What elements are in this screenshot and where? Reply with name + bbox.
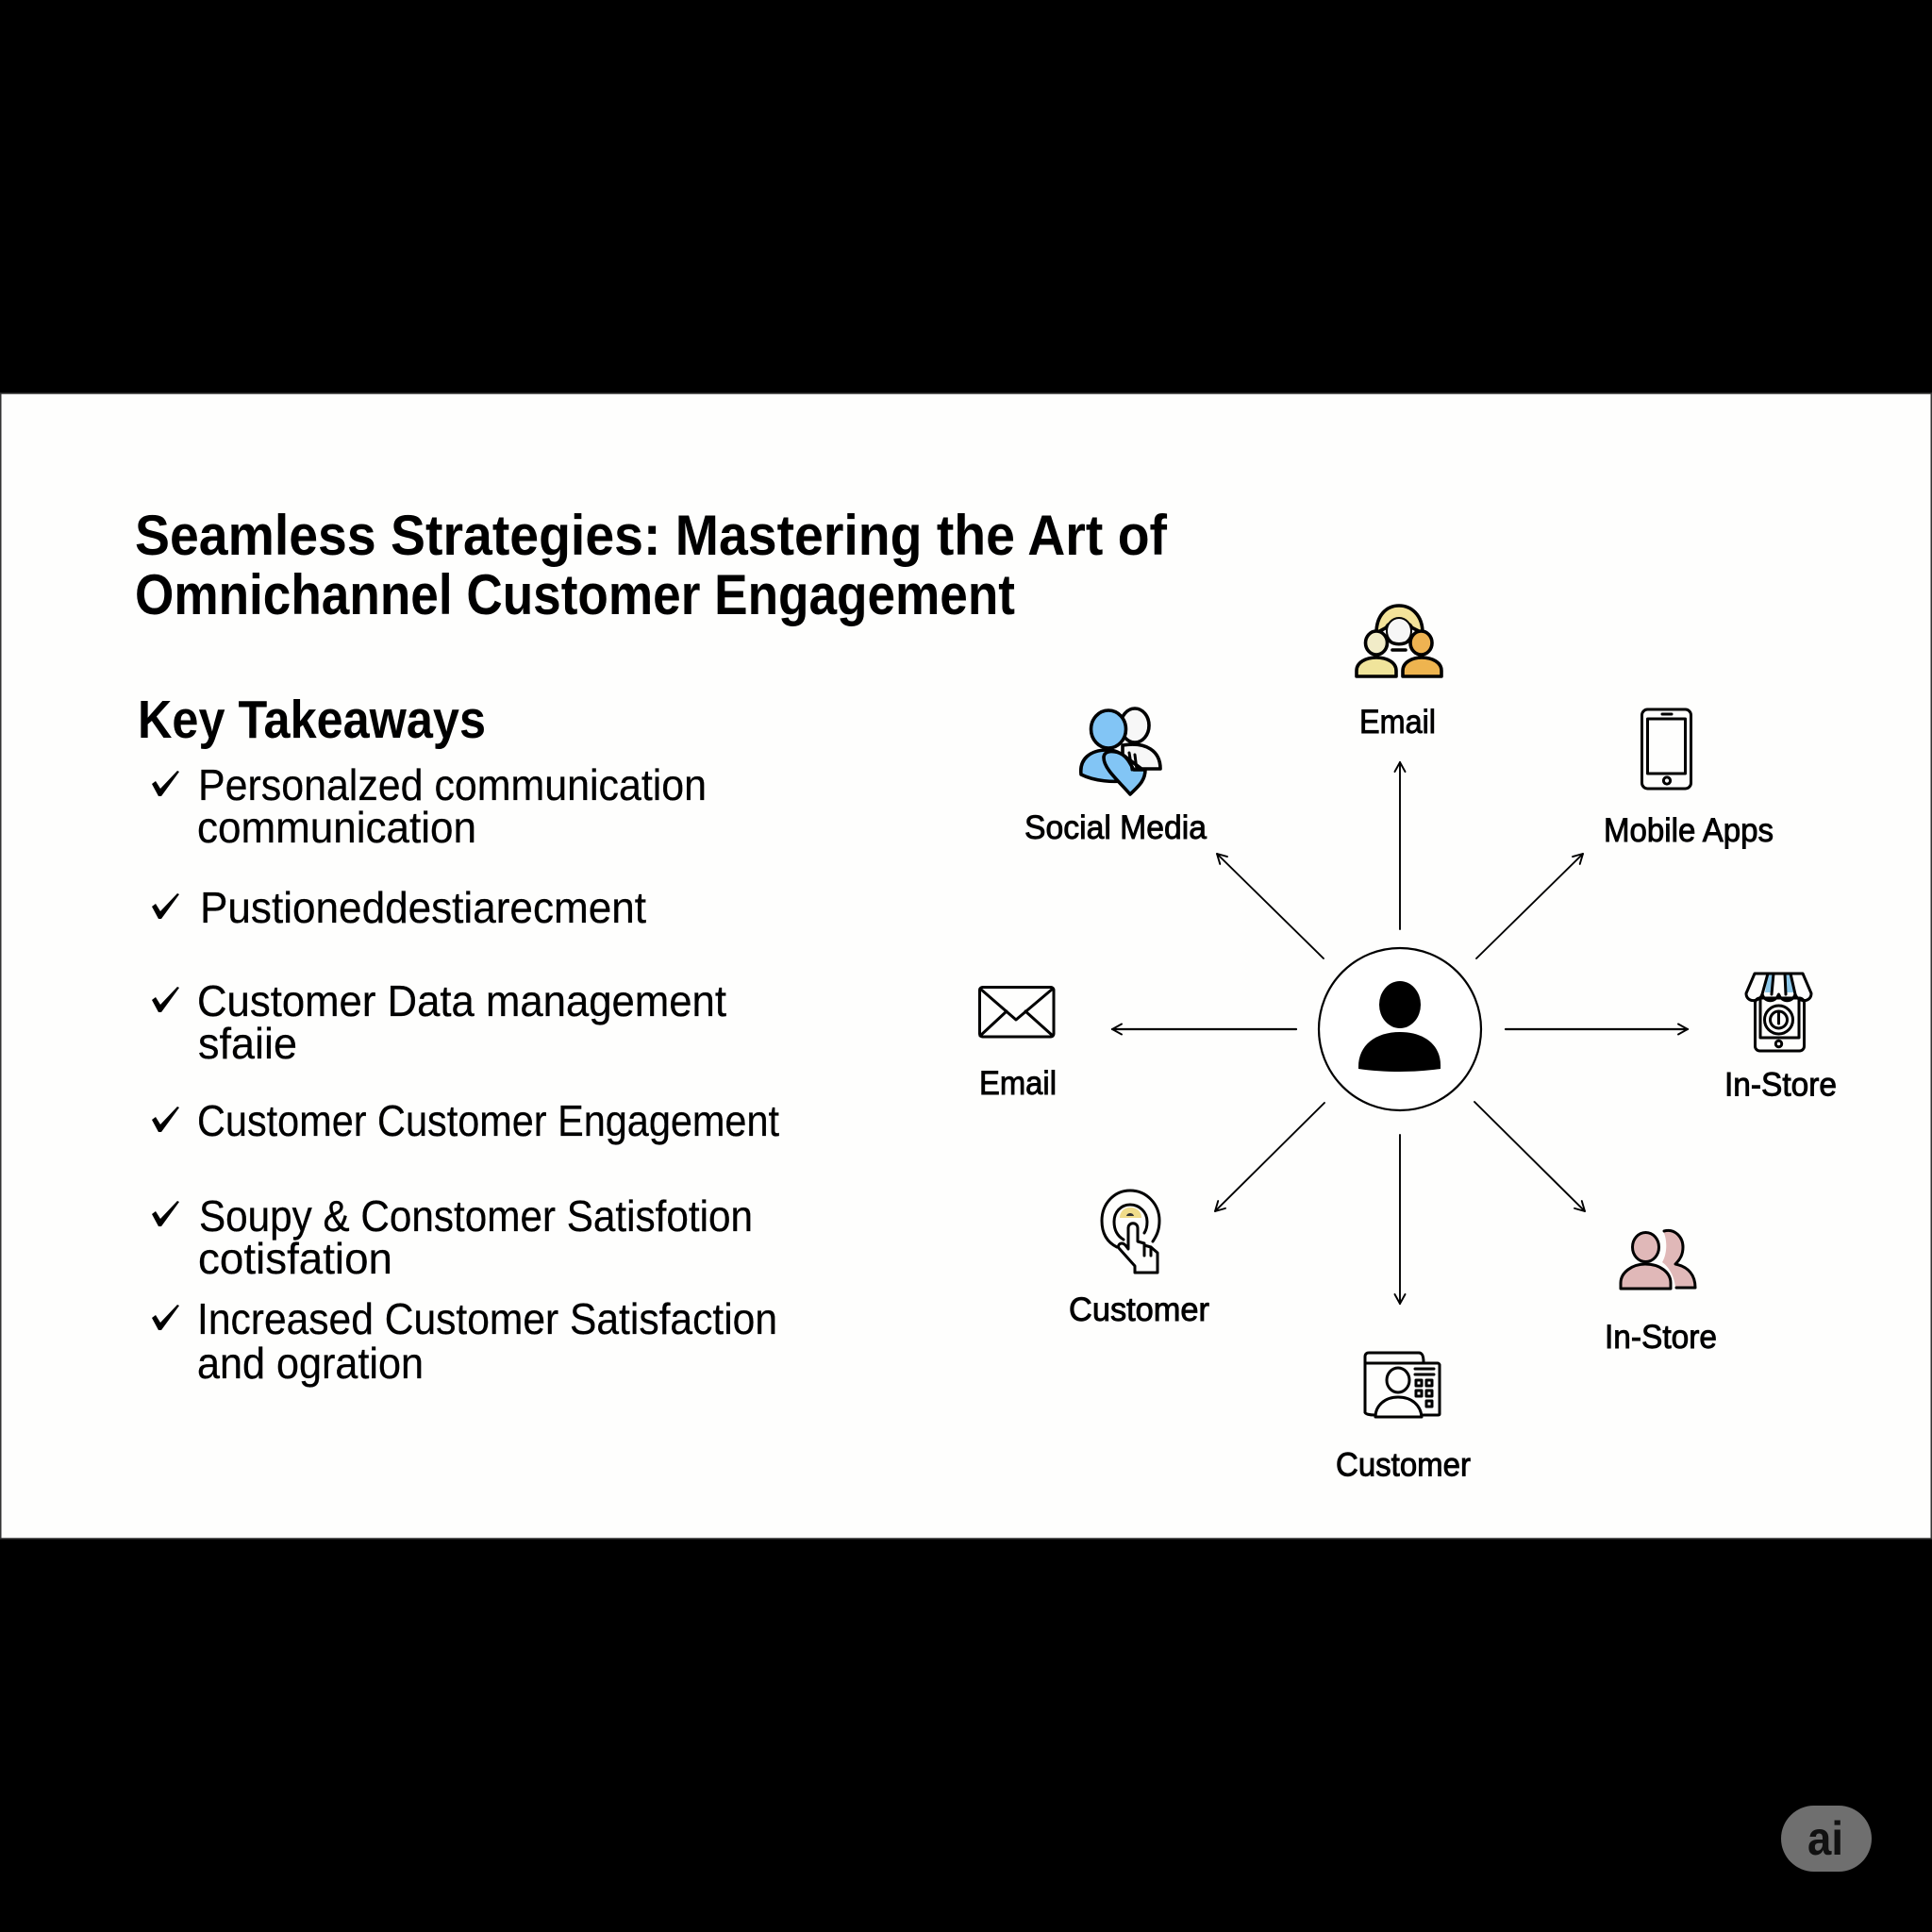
node: social media bbox=[1024, 708, 1208, 846]
arrow: lower right bbox=[1474, 1102, 1585, 1211]
arrow: upper right bbox=[1476, 854, 1583, 958]
arrow: right bbox=[1506, 1028, 1688, 1030]
arrow: left bbox=[1112, 1028, 1296, 1030]
icon: smartphone bbox=[1641, 709, 1690, 789]
takeaway 2 text: Pustioneddestiarecment bbox=[200, 883, 646, 932]
label: email: Email bbox=[979, 1065, 1057, 1102]
heading: key takeaways: Key Takeaways bbox=[138, 690, 486, 750]
label: social media: Social Media bbox=[1024, 809, 1208, 846]
takeaway 5 text: Soupy & Constomer Satisfotion bbox=[199, 1191, 753, 1241]
icon: check bbox=[152, 987, 179, 1012]
icon: check bbox=[152, 1201, 179, 1226]
icon: contact card bbox=[1365, 1353, 1440, 1417]
node: email left bbox=[979, 987, 1057, 1102]
takeaway 3 bbox=[152, 976, 726, 1068]
hub diagram bbox=[979, 606, 1837, 1483]
node: customer left bbox=[1069, 1191, 1209, 1328]
node: in-store right bbox=[1724, 974, 1837, 1104]
arrow: lower left bbox=[1215, 1103, 1324, 1211]
badge: ai watermark: ai bbox=[1807, 1812, 1843, 1865]
icon: central customer bbox=[1319, 948, 1481, 1110]
node: in-store bottom bbox=[1605, 1230, 1717, 1356]
takeaway 6 bbox=[152, 1294, 777, 1388]
takeaway 3 text: Customer Data management bbox=[197, 976, 726, 1025]
arrow: down bbox=[1399, 1135, 1401, 1304]
title bbox=[135, 504, 1168, 626]
icon: store on device bbox=[1746, 974, 1811, 1051]
panel: white slide bbox=[1, 393, 1931, 1539]
takeaway 5 bbox=[152, 1191, 753, 1283]
takeaway 1 text: Personalzed communication bbox=[198, 760, 707, 809]
arrow: upper left bbox=[1217, 854, 1324, 958]
takeaway 1 bbox=[152, 760, 707, 852]
label: in-store: In-Store bbox=[1724, 1066, 1837, 1104]
takeaway 5 text: cotisfation bbox=[198, 1234, 392, 1283]
icon: check bbox=[152, 893, 179, 919]
arrow: up bbox=[1399, 762, 1401, 929]
takeaway 3 text bbox=[197, 976, 726, 1068]
icon: touch target bbox=[1102, 1191, 1159, 1273]
node: mobile apps bbox=[1604, 709, 1774, 849]
takeaway 1 text bbox=[197, 760, 707, 852]
takeaway 4 text: Customer Customer Engagement bbox=[197, 1096, 779, 1145]
icon: check bbox=[152, 1107, 179, 1132]
takeaway 4 bbox=[152, 1096, 779, 1145]
takeaway 6 text bbox=[197, 1294, 777, 1388]
takeaway 1 text: communication bbox=[197, 803, 476, 852]
icon: envelope bbox=[979, 987, 1054, 1037]
takeaway 2 bbox=[152, 883, 646, 932]
node: customer bottom bbox=[1336, 1353, 1471, 1483]
badge: ai watermark bbox=[1781, 1806, 1872, 1872]
label: email: Email bbox=[1359, 704, 1436, 741]
takeaway 3 text: sfaiie bbox=[198, 1019, 297, 1068]
title: Omnichannel Customer Engagement bbox=[135, 563, 1015, 626]
icon: check bbox=[152, 771, 179, 796]
takeaway 5 text bbox=[198, 1191, 753, 1283]
takeaway 6 text: and ogration bbox=[197, 1339, 424, 1388]
icon: pink people bbox=[1621, 1230, 1695, 1289]
label: customer: Customer bbox=[1336, 1447, 1471, 1483]
title: Seamless Strategies: Mastering the Art of bbox=[135, 504, 1168, 567]
icon: check bbox=[152, 1305, 179, 1330]
panel: key takeaways bbox=[138, 690, 779, 1388]
icon: team bbox=[1357, 606, 1441, 676]
node: email top bbox=[1357, 606, 1441, 741]
label: mobile apps: Mobile Apps bbox=[1604, 812, 1774, 849]
label: customer: Customer bbox=[1069, 1291, 1209, 1328]
label: in-store: In-Store bbox=[1605, 1319, 1717, 1356]
icon: social people with heart bbox=[1081, 708, 1160, 794]
takeaway 6 text: Increased Customer Satisfaction bbox=[197, 1294, 777, 1343]
